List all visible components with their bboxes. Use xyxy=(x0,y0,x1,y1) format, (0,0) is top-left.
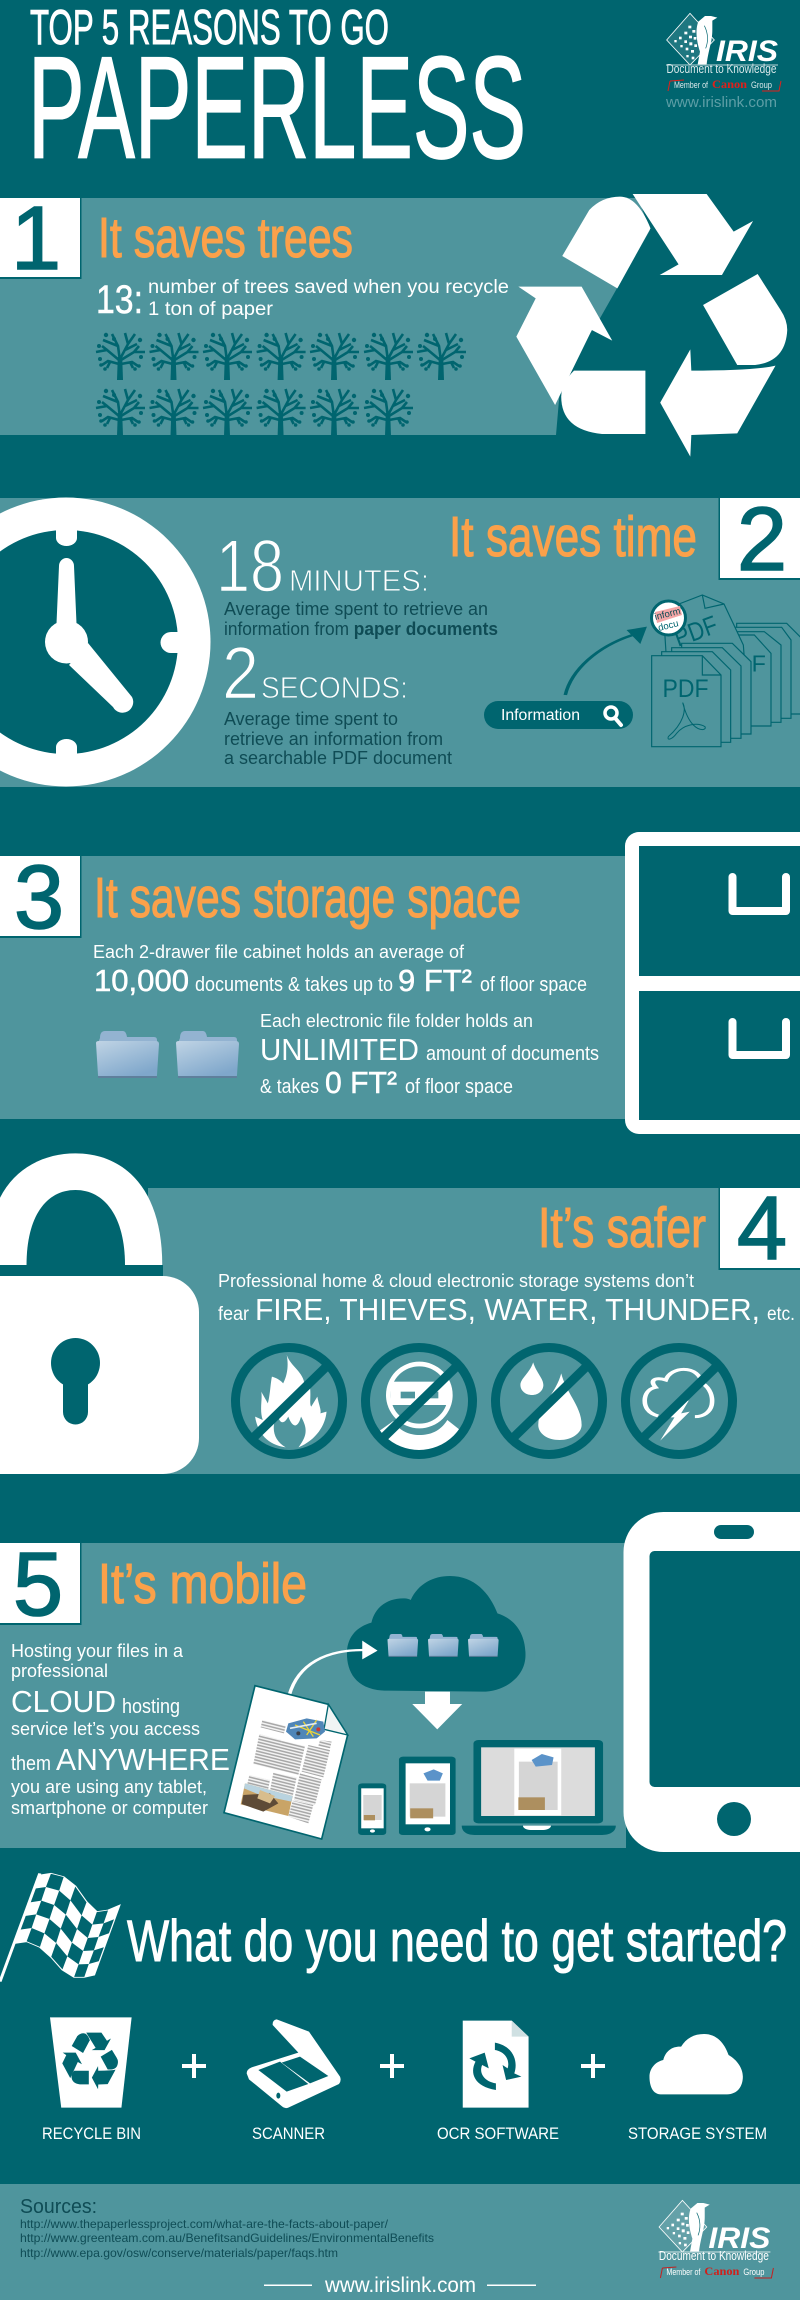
icon: stack of PDF documents xyxy=(652,595,800,747)
icon: scanner xyxy=(247,2019,341,2108)
search bar: Information xyxy=(501,707,580,724)
stat: 18 minutes: information from paper documents xyxy=(224,619,498,639)
number box 4 xyxy=(718,1179,800,1279)
text: cloud hosting: professional xyxy=(11,1661,108,1681)
labels: RECYCLE BIN xyxy=(42,2124,141,2143)
logo: IRIS header: Document to Knowledge xyxy=(666,62,777,76)
icon: checkered flag xyxy=(0,1873,120,1982)
logo: IRIS footer: Member of xyxy=(666,2267,701,2277)
heading: It’s safer xyxy=(538,1196,706,1260)
icon: clock xyxy=(0,498,210,786)
logo: IRIS header: www.irislink.com xyxy=(665,94,777,111)
icon: stack of PDF documents: PDF xyxy=(670,609,721,653)
text: safety fact: fear xyxy=(218,1304,250,1325)
plus xyxy=(182,2054,206,2078)
panel: it saves time xyxy=(0,490,800,787)
sources list xyxy=(20,2196,434,2260)
text: safety fact: Professional home & cloud electronic storage systems don’t xyxy=(218,1271,694,1291)
icon: no thunder xyxy=(626,1348,732,1454)
icon: stack of PDF documents: PDF xyxy=(662,675,708,703)
text: cloud hosting: CLOUD xyxy=(11,1684,116,1719)
arrow: cloud to devices xyxy=(412,1692,462,1729)
icon: cloud with folders xyxy=(347,1576,526,1692)
logo: IRIS header: Group xyxy=(751,80,772,90)
heading: It saves storage space xyxy=(94,866,521,930)
stat: 13 trees: 13: xyxy=(96,278,143,322)
text: file cabinet fact: 10,000 xyxy=(94,963,189,998)
logo: IRIS footer: Canon xyxy=(704,2264,740,2278)
logo: IRIS footer: IRIS xyxy=(708,2222,770,2255)
heading: It saves trees xyxy=(98,206,353,270)
icons: phone tablet laptop xyxy=(358,1740,616,1835)
text: safety fact: FIRE, THIEVES, WATER, THUNDER, xyxy=(255,1292,760,1327)
number box 1: 1 xyxy=(11,189,61,289)
text: file cabinet fact: documents & takes up to xyxy=(195,974,393,996)
icon: paper document xyxy=(224,1686,348,1839)
number box 2 xyxy=(718,490,800,590)
icon: recycle bin xyxy=(50,2017,132,2108)
panel: it's safer xyxy=(0,1153,800,1474)
icon: no thieves xyxy=(366,1348,472,1454)
number box 3 xyxy=(0,848,82,948)
number box 5 xyxy=(0,1535,82,1635)
text: electronic folder fact xyxy=(260,1011,599,1100)
stat: 2 seconds: retrieve an information from xyxy=(224,729,443,749)
heading: It’s mobile xyxy=(98,1552,307,1616)
logo: IRIS header: IRIS xyxy=(716,35,778,68)
text: cloud hosting: them xyxy=(11,1753,51,1775)
text: electronic folder fact: amount of documents xyxy=(426,1043,599,1065)
text: safety fact: etc. xyxy=(767,1304,795,1325)
tree row one xyxy=(96,333,466,380)
stat: 2 seconds: 2 xyxy=(222,632,259,714)
logo: IRIS footer xyxy=(658,2200,773,2278)
text: cloud hosting: hosting xyxy=(122,1696,180,1718)
text: safety fact xyxy=(218,1271,795,1327)
heading: It saves time xyxy=(449,505,697,569)
text: cloud hosting xyxy=(11,1641,230,1818)
text: electronic folder fact: UNLIMITED xyxy=(260,1032,419,1067)
icon: OCR software xyxy=(463,2021,529,2108)
icon: no water xyxy=(496,1348,602,1454)
magnifier: highlighted text: docu xyxy=(657,618,680,634)
text: cloud hosting: smartphone or computer xyxy=(11,1798,208,1818)
stat: 2 seconds: a searchable PDF document xyxy=(224,748,452,768)
icon: padlock xyxy=(0,1153,199,1474)
stat: 18 minutes: Average time spent to retrieve an xyxy=(224,599,488,619)
text: file cabinet fact: of floor space xyxy=(480,974,587,996)
stat: 18 minutes: MINUTES: xyxy=(289,563,429,598)
labels: OCR SOFTWARE xyxy=(437,2124,559,2143)
stat: 13 trees: number of trees saved when you recycle xyxy=(148,277,509,298)
search bar xyxy=(484,701,633,729)
icon: storage cloud xyxy=(649,2034,743,2094)
arrow: document to cloud xyxy=(289,1641,378,1695)
labels: STORAGE SYSTEM xyxy=(628,2124,767,2143)
stat: 2 seconds xyxy=(222,632,452,768)
labels: SCANNER xyxy=(252,2124,325,2143)
panel: it saves trees xyxy=(0,189,787,457)
stat: 13 trees: 1 ton of paper xyxy=(148,299,274,320)
text: file cabinet fact: Each 2-drawer file cabinet holds an average of xyxy=(93,942,465,962)
number box 5: 5 xyxy=(13,1535,63,1635)
plus xyxy=(380,2054,404,2078)
title block xyxy=(28,1,526,188)
website link: www.irislink.com xyxy=(324,2274,476,2297)
stat: 2 seconds: Average time spent to xyxy=(224,709,398,729)
icon: recycle symbol xyxy=(516,194,787,457)
logo: IRIS header xyxy=(665,13,781,111)
plus xyxy=(581,2054,605,2078)
tree row two xyxy=(96,389,413,436)
labels xyxy=(42,2124,767,2143)
section: what do you need to get started xyxy=(0,1873,787,2143)
icon: smartphone xyxy=(624,1512,800,1852)
icon: file cabinet xyxy=(625,832,800,1134)
panel: it's mobile xyxy=(0,1512,800,1852)
number box 3: 3 xyxy=(14,848,64,948)
text: cloud hosting: ANYWHERE xyxy=(56,1742,230,1777)
number box 2: 2 xyxy=(737,490,787,590)
number box 1 xyxy=(0,189,82,289)
sources list: http://www.greenteam.com.au/BenefitsandGuidelines/EnvironmentalBenefits xyxy=(20,2231,434,2245)
icons: two folders xyxy=(96,1031,239,1078)
text: electronic folder fact: 0 FT² xyxy=(325,1065,397,1100)
title: top line: TOP 5 REASONS TO GO xyxy=(30,1,389,55)
logo: IRIS footer: Document to Knowledge xyxy=(659,2249,769,2263)
icon: no fire xyxy=(236,1348,342,1454)
text: cloud hosting: you are using any tablet, xyxy=(11,1777,207,1797)
text: file cabinet fact xyxy=(93,942,587,998)
logo: IRIS header: Canon xyxy=(712,77,747,91)
text: electronic folder fact: & takes xyxy=(260,1076,319,1098)
number box 4: 4 xyxy=(737,1179,787,1279)
icon: stack of PDF documents: F xyxy=(752,651,766,677)
arrow: search to documents xyxy=(565,627,647,695)
stat: 2 seconds: SECONDS: xyxy=(261,670,408,705)
panel: sources footer xyxy=(0,2184,800,2300)
logo: IRIS footer: Group xyxy=(743,2267,764,2277)
text: electronic folder fact: Each electronic file folder holds an xyxy=(260,1011,533,1031)
text: file cabinet fact: 9 FT² xyxy=(398,963,472,998)
sources list: http://www.epa.gov/osw/conserve/materials/paper/faqs.htm xyxy=(20,2246,338,2260)
text: electronic folder fact: of floor space xyxy=(405,1076,513,1098)
magnifier: highlighted text: inform xyxy=(654,606,682,623)
stat: 18 minutes: 18 xyxy=(216,524,284,608)
sources list: Sources: xyxy=(20,2196,97,2218)
magnifier: highlighted text xyxy=(652,601,686,635)
panel: it saves storage space xyxy=(0,832,800,1134)
stat: 13 trees xyxy=(96,277,509,322)
stat: 18 minutes xyxy=(216,524,498,639)
logo: IRIS header: Member of xyxy=(674,80,708,90)
text: cloud hosting: service let’s you access xyxy=(11,1719,200,1739)
sources list: http://www.thepaperlessproject.com/what-are-the-facts-about-paper/ xyxy=(20,2217,389,2231)
text: cloud hosting: Hosting your files in a xyxy=(11,1641,184,1661)
